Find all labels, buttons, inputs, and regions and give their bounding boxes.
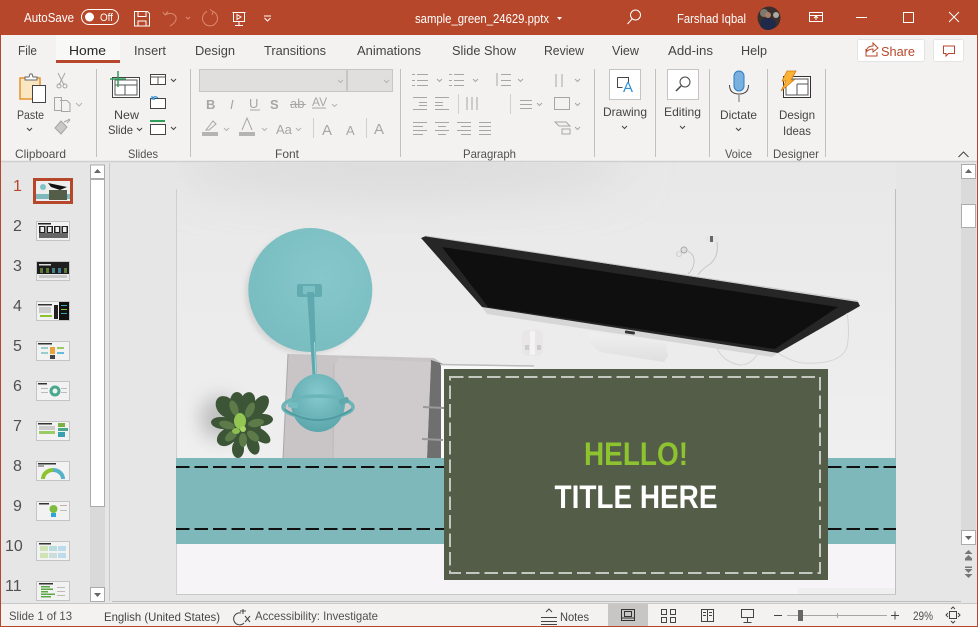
- user name: Farshad Iqbal: [677, 12, 746, 26]
- right scrollbar: [961, 164, 976, 601]
- thumbnail 2: [36, 222, 70, 240]
- thumbnail 3: [36, 262, 70, 280]
- slide numbers: 5: [13, 338, 22, 355]
- photo: lamp: [245, 228, 372, 432]
- editing button: Editing: [664, 105, 701, 119]
- active tab: [56, 35, 120, 63]
- tabs: View: [612, 43, 639, 58]
- group labels: [15, 147, 819, 161]
- group labels: Font: [275, 147, 300, 161]
- group labels: Designer: [773, 147, 819, 161]
- file menu caret: [557, 17, 562, 20]
- slide numbers: 4: [13, 298, 22, 315]
- thumbnail 5: [36, 342, 70, 360]
- slide numbers: 8: [13, 458, 22, 475]
- tabs: Transitions: [264, 43, 326, 58]
- font group: A: [322, 122, 332, 139]
- group labels: Clipboard: [15, 147, 66, 161]
- window controls: [810, 12, 959, 22]
- slide numbers: 7: [13, 418, 22, 435]
- title bar: [0, 0, 978, 35]
- photo: cup: [525, 331, 541, 350]
- view buttons: [608, 604, 754, 626]
- quick access icons: [134, 10, 271, 26]
- tabs: Slide Show: [452, 43, 516, 58]
- font group: A: [346, 123, 355, 138]
- thumbnail 6: [36, 382, 70, 400]
- search icon: [628, 10, 640, 24]
- font group: A: [374, 121, 384, 138]
- thumbnail 8: [36, 462, 70, 480]
- font group: I: [230, 97, 234, 112]
- file name: sample_green_24629.pptx: [415, 12, 550, 26]
- title card: [444, 369, 828, 580]
- collapse ribbon arrow: [958, 152, 968, 157]
- tabs: [18, 43, 767, 58]
- font group: S: [270, 97, 279, 112]
- design ideas button: Ideas: [783, 124, 811, 138]
- thumbnail 7: [36, 422, 70, 440]
- slides group: New: [114, 108, 139, 122]
- slide numbers: 3: [13, 258, 22, 275]
- thumbnail 11: [36, 582, 70, 600]
- slides group: [108, 71, 176, 137]
- ribbon: [0, 35, 978, 162]
- zoom slider: [774, 610, 899, 621]
- thumbnail pane: [1, 163, 109, 602]
- font group: B: [206, 97, 215, 112]
- group labels: Voice: [725, 147, 752, 161]
- photo: monitor: [421, 236, 860, 362]
- autosave toggle: AutoSave: [24, 10, 74, 25]
- design ideas button: Design: [779, 108, 815, 122]
- slide numbers: 10: [5, 538, 23, 555]
- slide: [170, 133, 897, 595]
- design ideas button: [779, 71, 815, 138]
- fit to window icon: [946, 607, 960, 623]
- tabs: Add-ins: [668, 43, 713, 58]
- photo: earphones and cable: [676, 236, 848, 365]
- tabs: Help: [741, 43, 767, 58]
- zoom level: 29%: [913, 611, 933, 623]
- dictate button: [720, 71, 757, 130]
- clipboard group: [17, 73, 82, 134]
- accessibility: Accessibility: Investigate: [255, 609, 378, 623]
- share button: [858, 40, 924, 62]
- tabs: Insert: [134, 43, 166, 58]
- slide numbers: 9: [13, 498, 22, 515]
- clipboard group: Paste: [17, 108, 44, 122]
- drawing button: A: [623, 79, 633, 96]
- font group: Aa: [276, 122, 293, 137]
- font group: U: [249, 96, 258, 111]
- slide numbers: 11: [5, 578, 22, 595]
- tabs: File: [18, 43, 37, 58]
- slide counter: Slide 1 of 13: [9, 609, 72, 623]
- font group: ab: [290, 96, 304, 111]
- slide numbers: 2: [13, 218, 22, 235]
- teal band: [176, 458, 896, 544]
- autosave toggle: Off: [100, 12, 114, 24]
- group labels: Slides: [128, 147, 158, 161]
- slide editing area: [110, 133, 961, 602]
- tabs: Design: [195, 43, 235, 58]
- thumbnail 10: [36, 542, 70, 560]
- group labels: Paragraph: [463, 147, 516, 161]
- comments button: [934, 40, 964, 62]
- tabs: Home: [69, 43, 106, 58]
- paragraph group: [412, 73, 580, 134]
- user avatar: [758, 6, 780, 30]
- pane scrollbar: [90, 165, 105, 602]
- heading: title here: TITLE HERE: [554, 479, 718, 515]
- heading: hello: HELLO!: [584, 436, 688, 472]
- drawing button: [603, 70, 647, 128]
- group separators: [96, 69, 826, 157]
- editing button: [664, 70, 701, 128]
- font group: AV: [312, 95, 327, 109]
- slide numbers: 6: [13, 378, 22, 395]
- tabs: Review: [544, 43, 584, 58]
- notes: Notes: [560, 610, 589, 624]
- drawing button: Drawing: [603, 105, 647, 119]
- notes: [541, 609, 589, 624]
- share button: Share: [881, 44, 915, 59]
- autosave toggle: [24, 10, 118, 25]
- slide numbers: [5, 178, 23, 595]
- photo: plant: [200, 390, 273, 458]
- thumbnail 4: [36, 302, 70, 320]
- slide numbers: 1: [13, 178, 22, 195]
- thumbnail 1: [34, 180, 72, 202]
- thumbnail 9: [36, 502, 70, 520]
- font group: [200, 70, 392, 139]
- language: English (United States): [104, 610, 220, 624]
- status bar: [0, 604, 978, 626]
- dictate button: Dictate: [720, 108, 757, 122]
- slides group: Slide: [108, 123, 133, 137]
- photo: binder: [283, 354, 534, 458]
- tabs: Animations: [357, 43, 421, 58]
